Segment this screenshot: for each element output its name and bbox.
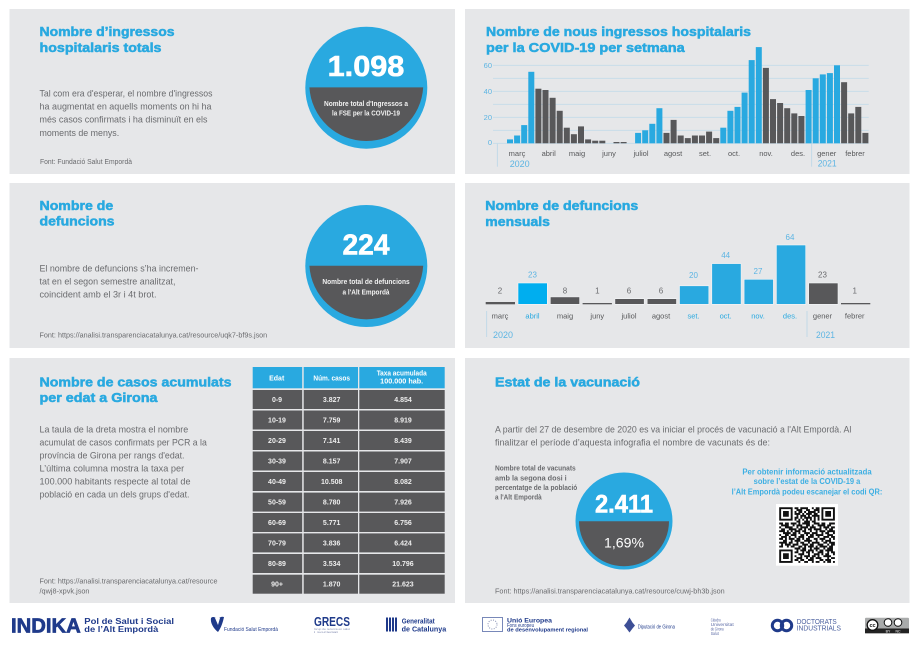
- text block: QR instructions: l’Alt Empordà podeu escanejar el codi QR:: [732, 487, 882, 496]
- table header: Núm. casos: [313, 376, 350, 382]
- month labels: abril: [525, 312, 540, 320]
- callout: 2.411 vaccinated circle: 1,69%: [604, 534, 644, 550]
- source: cases data: /qwj8-xpvk.json: [40, 588, 90, 595]
- icon: QR code: [776, 504, 838, 566]
- callout: 224 deaths circle: 224: [342, 230, 390, 262]
- panel: weekly new admissions: [465, 9, 910, 174]
- logo: Unió Europea: [482, 618, 588, 634]
- month labels: maig: [557, 312, 573, 320]
- table rows: 1.870: [323, 582, 341, 589]
- table rows: 8.157: [323, 458, 341, 466]
- logo: GRECS: GRECS: [314, 615, 350, 629]
- table header: Edat: [269, 376, 285, 382]
- callout: 224 deaths circle: Nombre total de defuncions: [322, 279, 410, 286]
- panel: total deaths: [10, 183, 455, 348]
- bar chart: monthly deaths: [486, 233, 870, 341]
- heading: cases by age: Nombre de casos acumulats: [40, 375, 232, 389]
- text block: table description: 100.000 habitants respecte al total de: [40, 476, 190, 487]
- table rows: 20-29: [268, 438, 286, 445]
- callout: 2.411 vaccinated circle: [576, 472, 672, 570]
- text block: table description: acumulat de casos confirmats per PCR a la: [40, 437, 207, 448]
- table rows: 6.424: [394, 540, 412, 547]
- table rows: 4.854: [394, 397, 412, 404]
- logo: Universitat de Girona: Càtedra: [711, 618, 721, 622]
- text block: admissions description: moments de menys.: [40, 128, 119, 139]
- x axis labels: 2021: [818, 158, 837, 170]
- logo: GRECS: [314, 615, 350, 634]
- heading: total admissions: Nombre d’ingressos: [40, 25, 174, 39]
- text block: admissions description: [40, 89, 213, 139]
- value labels: 44: [721, 251, 731, 260]
- value labels: 1: [852, 286, 857, 296]
- logo: Doctorats Industrials: DOCTORATS: [797, 617, 837, 626]
- text block: circle caption: a l'Alt Empordà: [495, 495, 542, 502]
- callout: 2.411 vaccinated circle: 2.411: [595, 491, 653, 519]
- logo: INDIKA: de l’Alt Empordà: [84, 625, 159, 634]
- table rows: 8.780: [323, 500, 341, 507]
- value labels: 2: [498, 286, 503, 296]
- logo: Generalitat de Catalunya: [386, 618, 446, 633]
- table rows: 8.439: [394, 438, 412, 445]
- y axis labels: 40: [484, 87, 492, 96]
- heading: cases by age: [40, 375, 232, 405]
- icon: Creative Commons licence: cc: [869, 623, 876, 629]
- heading: deaths: [40, 199, 114, 229]
- x axis labels: juny: [601, 149, 616, 158]
- panel: monthly deaths: [465, 183, 910, 348]
- text block: table description: La taula de la dreta mostra el nombre: [40, 424, 188, 435]
- bar chart: weekly admissions: [484, 47, 869, 170]
- table rows: 3.827: [323, 397, 341, 404]
- table rows: 10.508: [321, 479, 343, 486]
- logo: GRECS: Grup de recerca en salut: [314, 627, 350, 631]
- text block: deaths description: coincident amb el 3r i 4t brot.: [40, 290, 156, 301]
- logo: GRECS: i societat: [314, 630, 338, 634]
- table rows: 3.836: [323, 540, 341, 547]
- text block: table description: [40, 424, 207, 501]
- text block: deaths description: tat en el segon semestre analitzat,: [40, 276, 176, 287]
- heading: monthly deaths: Nombre de defuncions: [485, 199, 638, 213]
- heading: deaths: Nombre de: [40, 199, 113, 213]
- table rows: 8.919: [394, 418, 412, 424]
- table rows: 6.756: [394, 520, 412, 527]
- month labels: 2020: [493, 330, 513, 341]
- text block: table description: província de Girona per rangs d'edat.: [40, 450, 184, 461]
- value labels: 6: [659, 286, 664, 296]
- icon: Creative Commons licence: NC: [895, 629, 901, 633]
- y axis labels: 20: [484, 113, 492, 122]
- text block: deaths description: [40, 263, 198, 301]
- callout: 1.098 admissions circle: la FSE per la COVID-19: [332, 111, 400, 118]
- callout: 1.098 admissions circle: [305, 27, 427, 149]
- text block: admissions description: més casos confirmats i ha disminuït en els: [40, 115, 208, 126]
- y axis labels: 0: [488, 138, 492, 147]
- text block: circle caption: [495, 465, 577, 502]
- callout: 1.098 admissions circle: Nombre total d'Ingressos a: [324, 101, 408, 108]
- x axis labels: febrer: [845, 149, 865, 158]
- logo: Diputació de Girona: Diputació de Girona: [638, 625, 675, 631]
- value labels: 23: [528, 270, 537, 280]
- logo: INDIKA: Pol de Salut i Social: [84, 617, 174, 626]
- logo: Fundació Salut Empordà: Fundació Salut Empordà: [224, 627, 278, 633]
- table rows: 7.907: [394, 458, 412, 466]
- month labels: agost: [652, 312, 671, 320]
- logo: Generalitat de Catalunya: Generalitat: [402, 619, 435, 626]
- month labels: gener: [813, 312, 833, 320]
- heading: vaccination: Estat de la vacunació: [495, 375, 640, 389]
- table rows: 10.796: [392, 561, 414, 568]
- month labels: març: [492, 312, 509, 320]
- text block: table description: població en cada un dels grups d'edat.: [40, 490, 190, 501]
- x axis labels: agost: [664, 149, 683, 158]
- source: cases data: [40, 578, 218, 595]
- text block: circle caption: percentatge de la població: [495, 485, 577, 492]
- x axis labels: abril: [542, 149, 556, 158]
- x axis labels: març: [509, 149, 526, 158]
- source: cases data: Font: https://analisi.transparenciacatalunya.cat/resource: [40, 578, 218, 585]
- table rows: 10-19: [268, 418, 286, 424]
- logo: Unió Europea: Unió Europea: [507, 618, 552, 624]
- month labels: des.: [783, 312, 797, 320]
- table rows: 70-79: [268, 540, 286, 547]
- table rows: 60-69: [268, 520, 286, 527]
- source: Fundació Salut Empordà: Font: Fundació Salut Empordà: [40, 159, 132, 166]
- x axis labels: juliol: [632, 149, 649, 158]
- logo: Doctorats Industrials: INDUSTRIALS: [797, 624, 841, 633]
- heading: weekly admissions: Nombre de nous ingressos hospitalaris: [486, 25, 751, 39]
- table rows: 0-9: [272, 397, 282, 404]
- value labels: 27: [754, 267, 763, 276]
- panel: total hospital admissions: [10, 9, 455, 174]
- logo: INDIKA: [11, 614, 174, 638]
- text block: QR instructions: [732, 467, 882, 496]
- text block: vaccination description: finalitzar el període d’aquesta infografia el nombre de vacunats és de:: [495, 437, 770, 448]
- logo: Unió Europea: de desenvolupament regional: [507, 628, 588, 634]
- logo: INDIKA: INDIKA: [11, 614, 81, 638]
- callout: 224 deaths circle: a l'Alt Empordà: [342, 289, 390, 296]
- logo: Fundació Salut Empordà: [211, 617, 278, 633]
- table rows: 40-49: [268, 479, 286, 486]
- text block: QR instructions: sobre l’estat de la COVID-19 a: [754, 477, 861, 486]
- month labels: febrer: [845, 312, 865, 320]
- month labels: 2021: [816, 330, 835, 341]
- y axis labels: 60: [484, 61, 492, 70]
- table rows: 3.534: [323, 561, 341, 568]
- logo: Universitat de Girona: Universitat: [711, 622, 735, 627]
- logo: Universitat de Girona: [711, 618, 735, 636]
- source: vaccination data: Font: https://analisi.transparenciacatalunya.cat/resource/cuwj-bh3b.json: [495, 589, 725, 596]
- heading: deaths: defuncions: [40, 215, 114, 229]
- heading: total admissions: hospitalaris totals: [40, 41, 162, 55]
- value labels: [498, 233, 857, 296]
- table rows: 90+: [271, 582, 283, 589]
- text block: circle caption: amb la segona dosi i: [495, 475, 567, 482]
- source: deaths data: Font: https://analisi.transparenciacatalunya.cat/resource/uqk7-bf9s.json: [40, 333, 267, 340]
- table rows: 8.082: [394, 479, 412, 486]
- logo: Universitat de Girona: de Girona: [711, 626, 724, 632]
- logo: Diputació de Girona: [624, 618, 675, 632]
- table header: [253, 367, 445, 388]
- heading: monthly deaths: [485, 199, 638, 229]
- heading: weekly admissions: per la COVID-19 per setmana: [486, 41, 686, 55]
- month labels: oct.: [720, 312, 732, 320]
- month labels: nov.: [751, 312, 765, 320]
- table header: Taxa acumulada: [377, 370, 427, 378]
- callout: 224 deaths circle: [305, 205, 427, 327]
- x axis labels: oct.: [728, 149, 740, 158]
- logo: Generalitat de Catalunya: de Catalunya: [402, 626, 446, 633]
- logo: Universitat de Girona: Salut: [711, 631, 719, 636]
- table rows: 7.759: [323, 418, 341, 424]
- callout: 1.098 admissions circle: 1.098: [328, 51, 404, 83]
- text block: circle caption: Nombre total de vacunats: [495, 465, 576, 472]
- month labels: set.: [687, 312, 700, 320]
- month labels: juny: [589, 312, 604, 320]
- x axis labels: set.: [699, 149, 711, 158]
- value labels: 20: [689, 271, 698, 280]
- table rows: 21.623: [392, 582, 414, 589]
- value labels: 64: [786, 233, 795, 242]
- heading: total admissions: [40, 25, 174, 55]
- table rows: [253, 390, 445, 594]
- value labels: 6: [627, 286, 632, 296]
- value labels: 1: [595, 286, 600, 296]
- x axis labels: maig: [569, 149, 585, 158]
- table rows: 50-59: [268, 500, 286, 507]
- table: cases by age group: [253, 367, 445, 594]
- text block: vaccination description: A partir del 27 de desembre de 2020 es va iniciar el procés de vacunació a l'Alt Empordà. Al: [495, 424, 851, 435]
- month labels: juliol: [620, 312, 637, 320]
- logo: Doctorats Industrials: [772, 617, 841, 633]
- x axis labels: gener: [817, 149, 837, 158]
- x axis labels: nov.: [759, 149, 773, 158]
- table rows: 30-39: [268, 458, 286, 466]
- y axis labels: [484, 61, 492, 147]
- table header: 100.000 hab.: [380, 379, 423, 386]
- table rows: 5.771: [323, 520, 341, 527]
- heading: monthly deaths: mensuals: [485, 215, 550, 229]
- x axis labels: [497, 144, 865, 170]
- text block: admissions description: ha augmentat en aquells moments on hi ha: [40, 102, 212, 113]
- heading: cases by age: per edat a Girona: [40, 391, 159, 405]
- table rows: 7.141: [323, 438, 341, 445]
- value labels: 23: [818, 270, 827, 280]
- panel: cumulative cases by age: [10, 358, 455, 603]
- icon: Creative Commons licence: BY: [886, 629, 891, 633]
- text block: table description: L’última columna mostra la taxa per: [40, 463, 184, 474]
- x axis labels: 2020: [510, 159, 530, 170]
- x axis labels: des.: [791, 149, 805, 158]
- table rows: 80-89: [268, 561, 286, 568]
- text block: admissions description: Tal com era d'esperar, el nombre d'ingressos: [40, 89, 213, 100]
- icon: Creative Commons licence: [865, 618, 909, 633]
- panel: vaccination status: [465, 358, 910, 603]
- value labels: 8: [563, 286, 568, 296]
- text block: QR instructions: Per obtenir informació actualitzada: [742, 467, 872, 476]
- text block: deaths description: El nombre de defuncions s’ha incremen-: [40, 263, 198, 274]
- heading: weekly admissions: [486, 25, 751, 55]
- table rows: 7.926: [394, 500, 412, 507]
- text block: vaccination description: [495, 424, 851, 448]
- logo: Unió Europea: Fons europeu: [507, 623, 534, 629]
- month labels: [487, 311, 865, 341]
